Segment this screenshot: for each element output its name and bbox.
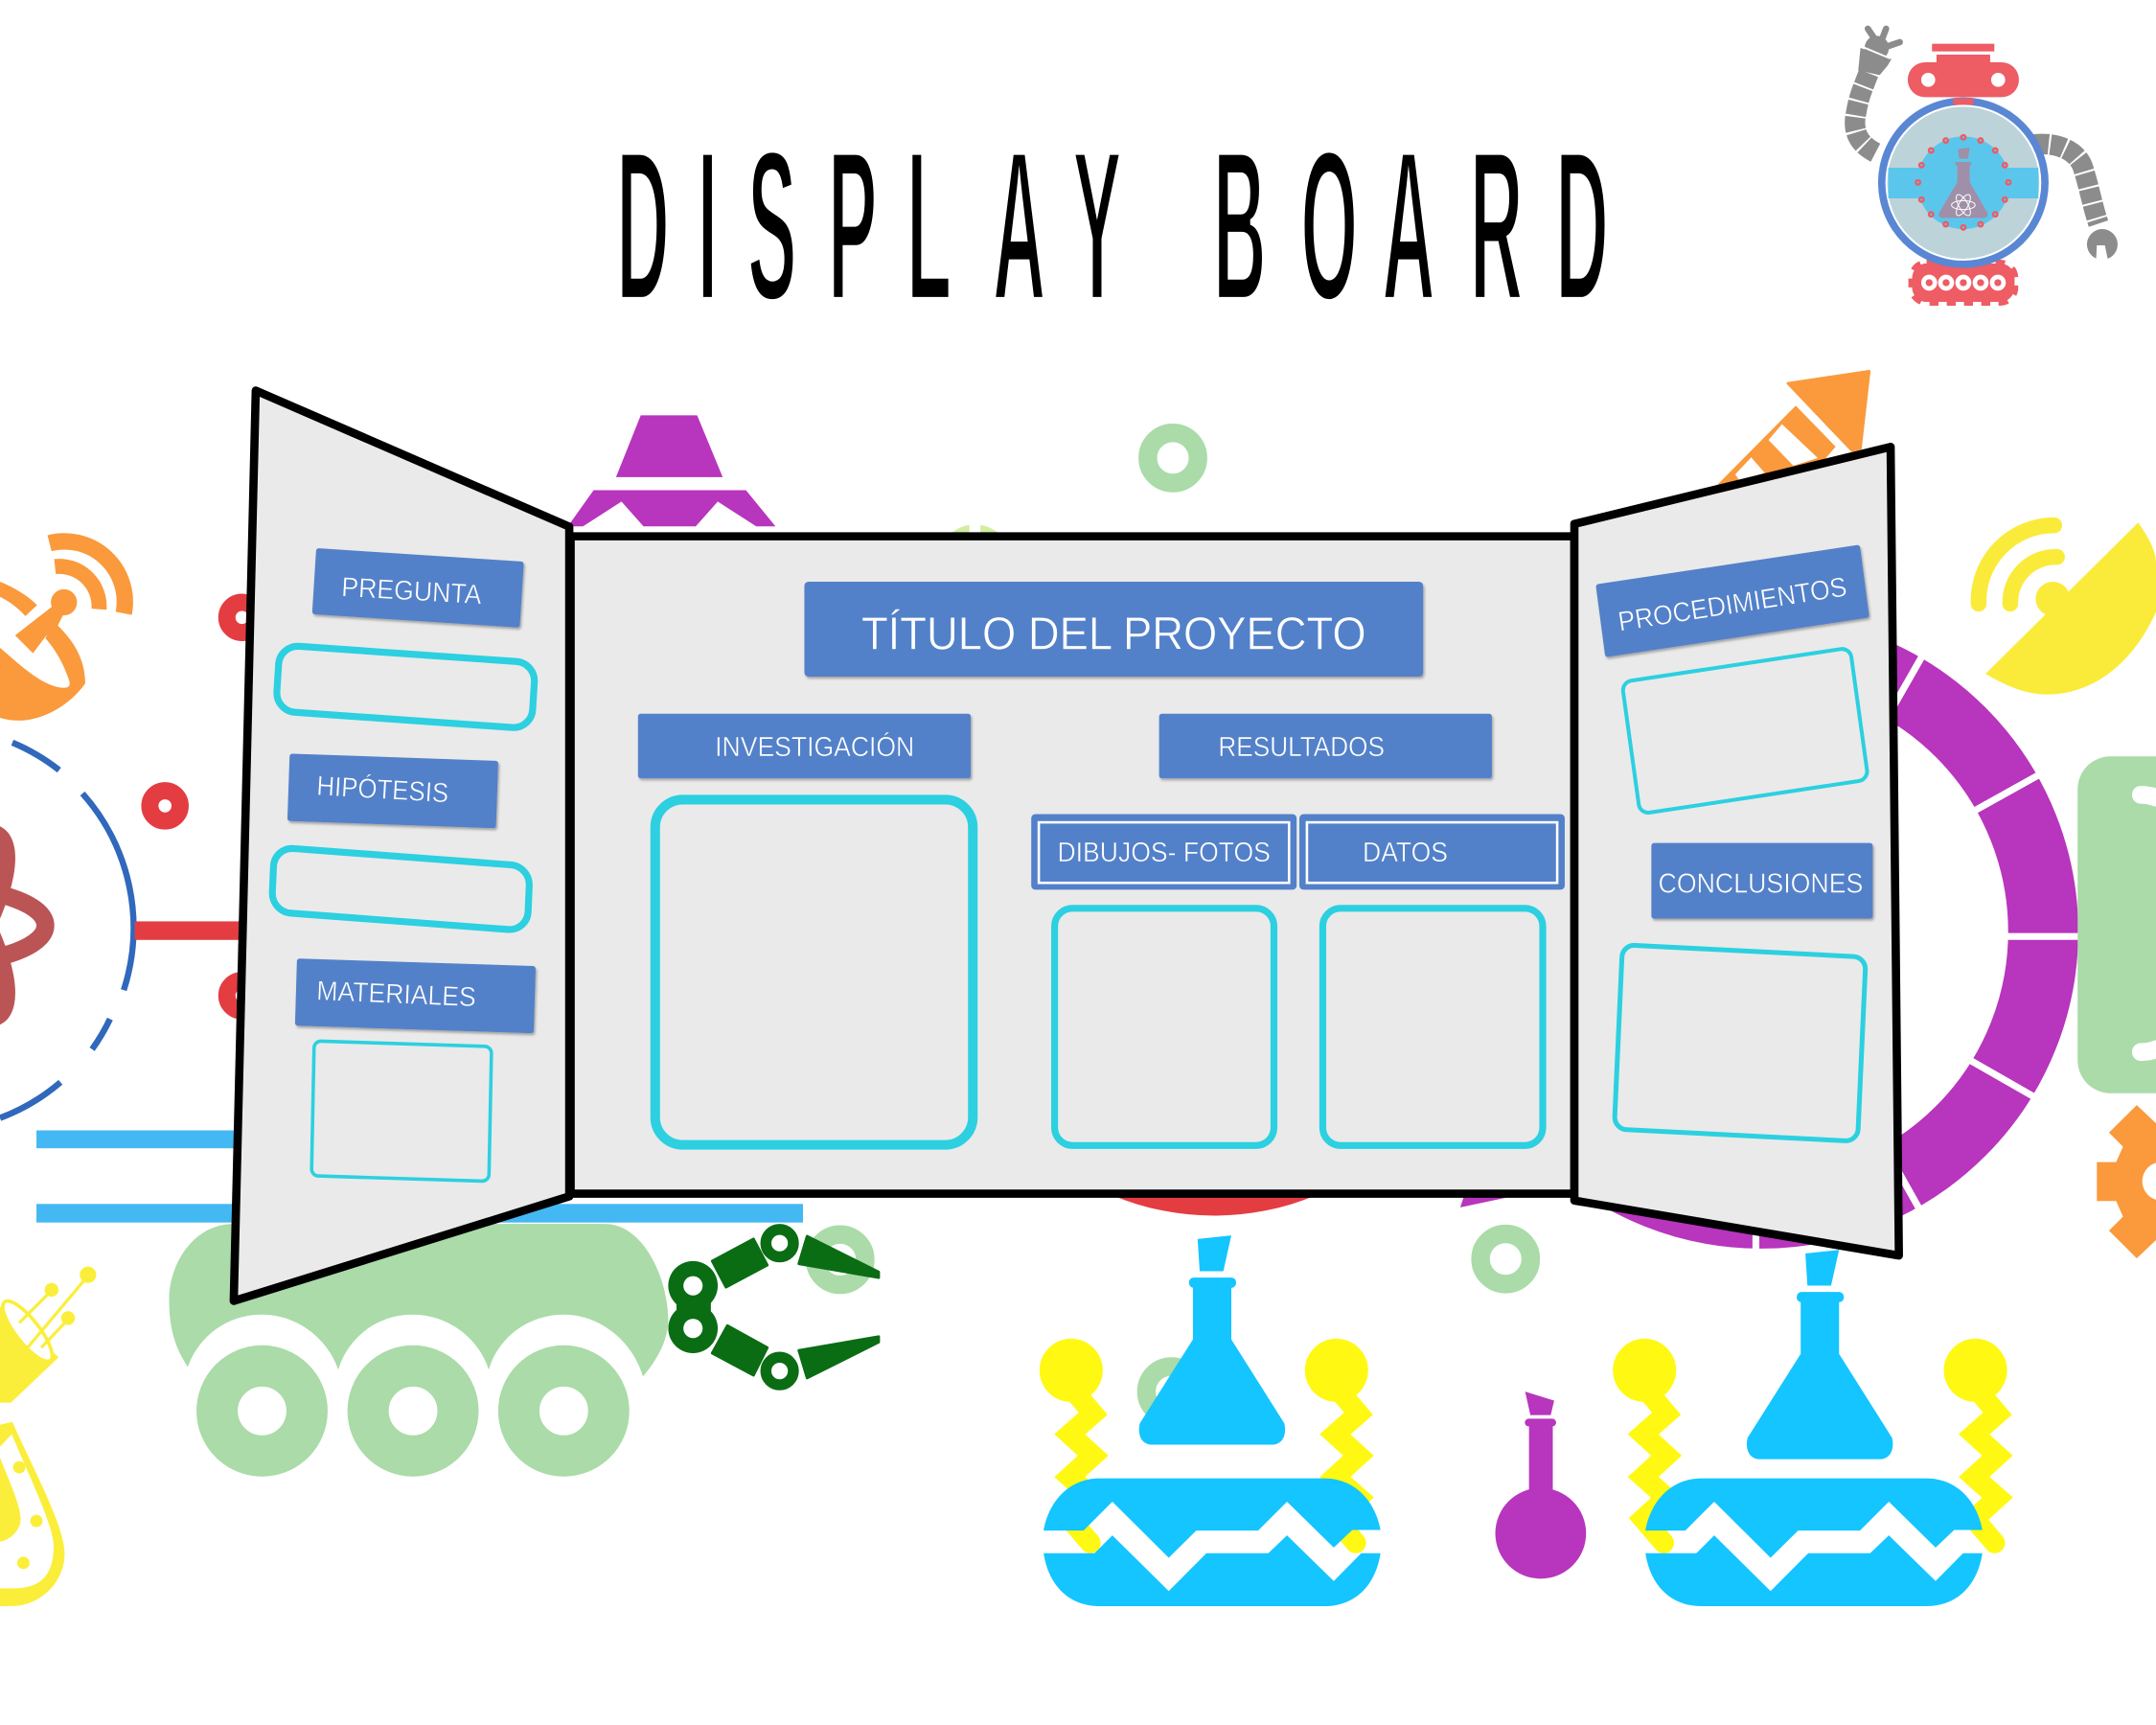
heading: titulo del proyecto: TÍTULO DEL PROYECTO <box>861 609 1366 660</box>
answer box: materiales <box>311 1041 492 1182</box>
icon: blue speed lines <box>36 1131 803 1223</box>
icon: yellow coil 3 <box>1613 1339 1676 1543</box>
icon: rover <box>169 1224 668 1456</box>
heading: titulo del proyecto <box>804 582 1423 677</box>
panel: left wing <box>234 391 569 1300</box>
answer box: hipotesis <box>271 847 530 931</box>
robot body <box>1878 98 2049 268</box>
icon: orange gear <box>2097 1105 2156 1258</box>
icon: robotic claw <box>668 1230 879 1385</box>
icon: cyan flask 2 <box>1747 1250 1892 1460</box>
icon: purple rocket top <box>568 415 775 526</box>
icon: dashed orbit circle <box>0 743 133 1118</box>
icon: green battery <box>2077 756 2156 1093</box>
answer box: investigacion <box>655 799 973 1145</box>
robot tread <box>1913 264 2014 302</box>
icon: yellow coil 2 <box>1305 1339 1368 1543</box>
label: pregunta <box>312 548 524 628</box>
icon: red connector and dots <box>135 603 257 1011</box>
icon: cyan flask 1 <box>1139 1235 1285 1445</box>
icon: yellow coil 1 <box>1040 1339 1103 1543</box>
label: hipotesis: HIPÓTESIS <box>316 770 449 809</box>
icon: purple ring gauge <box>1479 646 2092 1267</box>
label: datos <box>1299 814 1565 889</box>
label: resultados <box>1159 714 1492 778</box>
icon: yellow funnel with wires <box>0 1267 96 1403</box>
panel: right wing <box>1574 447 1899 1255</box>
robot right arm with wrench <box>2034 144 2118 264</box>
label: procedimientos <box>1595 544 1869 657</box>
label: procedimientos: PROCEDIMIENTOS <box>1617 572 1849 638</box>
icon: purple shard <box>1460 1191 1505 1208</box>
icon: green rings <box>1146 433 1530 1416</box>
title: DISPLAY BOARD <box>616 107 1609 346</box>
icon: red circle behind board <box>949 685 1479 1215</box>
icon: atom orbit <box>0 816 45 1035</box>
icon: orange rocket <box>1715 371 1869 497</box>
label: conclusiones <box>1651 843 1872 919</box>
label: dibujos fotos <box>1031 814 1296 889</box>
label: resultados: RESULTADOS <box>1218 732 1385 763</box>
icon: cyan burner 2 <box>1645 1479 1983 1606</box>
answer box: datos <box>1322 908 1543 1145</box>
icon: satellite dish orange <box>0 541 125 721</box>
label: pregunta: PREGUNTA <box>340 572 483 610</box>
answer box: dibujos <box>1055 908 1273 1145</box>
label: hipotesis <box>287 753 498 828</box>
answer box: procedimientos <box>1622 648 1869 814</box>
answer box: pregunta <box>276 645 536 729</box>
icon: green ring near claw <box>815 1234 865 1285</box>
label: investigacion <box>638 714 971 778</box>
label: investigacion: INVESTIGACIÓN <box>715 731 914 763</box>
label: conclusiones: CONCLUSIONES <box>1659 868 1863 899</box>
icon: yellow coil 4 <box>1944 1339 2007 1543</box>
icon: yellow satellite dish <box>1979 522 2156 695</box>
icon: purple flask <box>1496 1392 1586 1578</box>
icon: pale ring behind board <box>948 522 1002 588</box>
label: materiales <box>295 958 536 1033</box>
label: materiales: MATERIALES <box>316 976 476 1013</box>
label: dibujos fotos: DIBUJOS- FOTOS <box>1057 838 1271 868</box>
label: datos: DATOS <box>1363 838 1448 868</box>
answer box: conclusiones <box>1615 945 1866 1141</box>
robot left arm <box>1855 29 1900 152</box>
robot head <box>1908 44 2019 97</box>
icon: yellow drop bulb <box>0 1422 64 1606</box>
panel: center board <box>571 537 1574 1194</box>
icon: cyan burner 1 <box>1044 1479 1381 1606</box>
robot illustration <box>1855 29 2118 302</box>
